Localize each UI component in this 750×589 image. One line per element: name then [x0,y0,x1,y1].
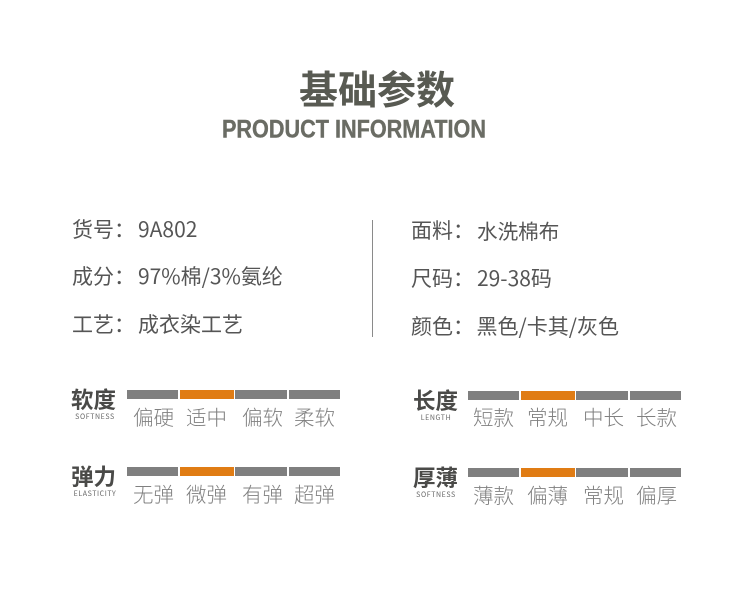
spec: fabric [411,215,559,245]
spec: fabric: 水洗棉布 [477,215,559,245]
options: softness: 柔软 [294,401,335,431]
spec: color: 黑色/卡其/灰色 [476,311,619,341]
options: softness [133,401,335,431]
spec: color: 颜色： [411,311,474,341]
options: elasticity: 有弹 [242,478,283,508]
active bar: medium [180,390,234,399]
caption: length: LENGTH [421,412,451,422]
spec: craft [72,309,243,339]
divider line [372,220,373,337]
active bar: regular [521,391,575,400]
spec: composition: 97%棉/3%氨纶 [138,261,283,291]
active bar: slight [180,467,234,476]
spec: size [411,263,552,293]
options: thickness: 偏薄 [527,479,568,509]
options: length: 短款 [473,401,514,431]
spec: item number: 货号： [72,214,135,244]
caption: thickness: SOFTNESS [416,490,456,500]
scale: elasticity [71,460,340,508]
spec: fabric: 面料： [411,215,474,245]
options: length: 常规 [527,401,568,431]
label: thickness: 厚薄 [413,461,458,493]
title: 基础参数 [299,60,455,116]
spec: item number [72,214,197,244]
options: length: 中长 [583,401,624,431]
scale: thickness [413,461,681,509]
options: elasticity: 无弹 [133,478,174,508]
options: thickness [473,479,677,509]
options: softness: 偏软 [242,401,283,431]
spec: craft: 成衣染工艺 [138,309,243,339]
scale: softness [71,383,340,431]
spec: composition [72,261,283,291]
caption: softness: SOFTNESS [75,412,115,422]
options: elasticity [133,478,335,508]
options: elasticity: 超弹 [294,478,335,508]
label: softness: 软度 [71,383,116,415]
options: softness: 偏硬 [133,401,174,431]
spec: size: 29-38码 [477,263,552,293]
options: elasticity: 微弹 [186,478,227,508]
spec: composition: 成分： [72,261,135,291]
label: length: 长度 [413,384,458,416]
options: length [473,401,677,431]
options: length: 长款 [636,401,677,431]
active bar: thin [521,468,575,477]
options: softness: 适中 [186,401,227,431]
options: thickness: 偏厚 [636,479,677,509]
spec: size: 尺码： [411,263,474,293]
caption: elasticity: ELASTICITY [74,488,116,498]
spec: color [411,311,619,341]
options: thickness: 常规 [583,479,624,509]
spec: item number: 9A802 [138,214,197,244]
spec: craft: 工艺： [72,309,135,339]
options: thickness: 薄款 [473,479,514,509]
scale: length [413,384,681,431]
label: elasticity: 弹力 [71,460,116,492]
